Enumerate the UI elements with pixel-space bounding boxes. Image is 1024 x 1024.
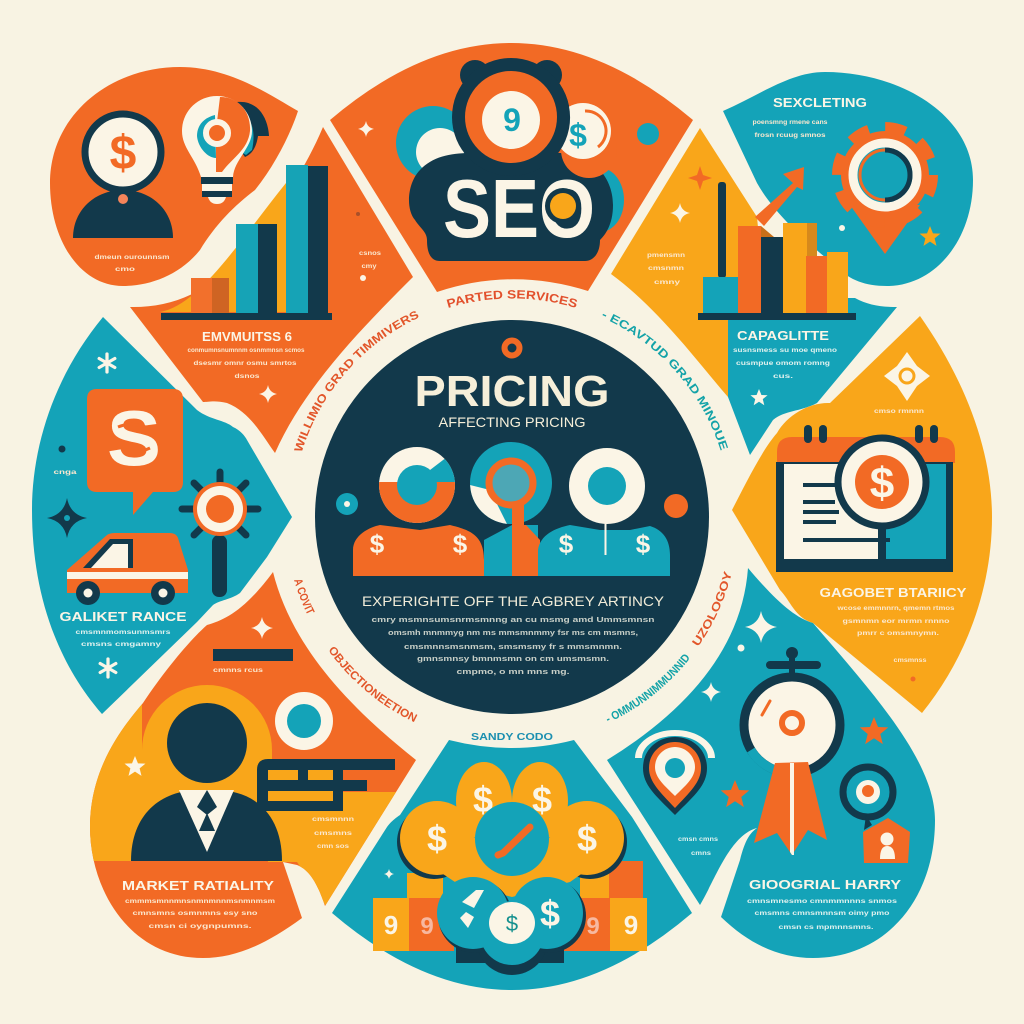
text block: cmy xyxy=(362,263,377,270)
icon: SEO coins and badge: 9 xyxy=(503,102,521,138)
text block: gmnsmnsy bmnmsmn on cm umsmsmn. xyxy=(417,656,609,663)
text block: cmsn cmns xyxy=(678,836,718,843)
icon: coin pile and blocks: 9 xyxy=(624,910,638,940)
text block xyxy=(647,252,837,380)
text block: cmo xyxy=(115,266,135,273)
text block: wcose emmnnrn, qmemn rtmos xyxy=(836,605,955,612)
text block: cmsmns xyxy=(314,830,353,837)
dot: teal xyxy=(336,493,358,515)
curved ring captions xyxy=(294,290,731,722)
heading: experience: EXPERIGHTE OFF THE AGBREY ARTINCY xyxy=(362,593,665,609)
text block: cmsmnmomsunmsmrs xyxy=(76,629,171,636)
icon: coin pile and blocks: 9 xyxy=(420,913,434,940)
icon: coin pile and blocks: 9 xyxy=(586,913,600,940)
curved ring captions: OBJECTIONEETION xyxy=(330,647,418,722)
text block xyxy=(76,629,171,648)
curved ring captions: UZOLOGOY xyxy=(692,571,731,646)
text block: cmmmsmnnmnsnmnmnnmsnmnmsm xyxy=(125,898,275,905)
icon: ornament xyxy=(884,352,930,401)
text block xyxy=(747,898,898,931)
text block: cmn sos xyxy=(317,843,349,850)
person: teal xyxy=(538,448,670,576)
icon: dollar speech bubble: S xyxy=(107,394,161,482)
text block: gsmnmn eor mrmn rnnno xyxy=(842,618,950,625)
dot: orange xyxy=(664,494,688,518)
text block xyxy=(752,119,828,139)
panel: right calendar xyxy=(732,316,992,713)
heading: pricing: PRICING xyxy=(414,367,610,416)
text block xyxy=(125,898,275,930)
icon: coin pile and blocks: $ xyxy=(473,779,493,820)
person: teal with orange magnifier xyxy=(470,442,552,576)
text block: cmsnmn xyxy=(648,265,684,272)
icon: navy star xyxy=(47,498,87,538)
panel: left van and pricing xyxy=(32,317,292,714)
icon: coin pile and blocks: $ xyxy=(427,818,447,859)
curved ring captions: - OMMUNNIMMUNNID xyxy=(606,654,689,721)
panel: top chart wedge xyxy=(130,127,413,453)
icon: coin pile and blocks xyxy=(373,762,647,975)
subheading: AFFECTING PRICING xyxy=(438,414,586,430)
icon: SEO coins and badge xyxy=(396,58,624,261)
curved ring captions: A COVIT xyxy=(294,580,315,614)
person: teal: $ xyxy=(559,529,574,559)
icon: person with dollar head xyxy=(73,114,173,238)
icon: calendar with magnifier: $ xyxy=(870,459,894,508)
icon: delivery van xyxy=(67,533,188,605)
text block: pmrr c omsmnymn. xyxy=(857,630,939,637)
heading: EMVMUITSS 6 xyxy=(202,329,292,344)
curved ring captions: - ECAVTUD GRAD MINOUE xyxy=(602,314,728,450)
text block: cmsmnnsmsnmsm, smsmsmy fr s mmsmnmn. xyxy=(404,644,622,651)
icon: gear pin xyxy=(839,129,931,254)
panel: bottom center coins xyxy=(332,740,692,990)
icon: medal with ribbon xyxy=(744,647,840,855)
person: orange: $ xyxy=(453,529,468,559)
icon: navy sign xyxy=(257,759,395,811)
heading: SEXCLETING xyxy=(773,95,867,110)
text block xyxy=(678,836,718,857)
panel: bottom-right geography xyxy=(607,568,935,958)
text block: dsesmr omnr osmu smrtos xyxy=(194,360,297,367)
bar chart: rising bars xyxy=(160,165,332,320)
text block: omsmh mnmmyg nm ms mmsmnmmy fsr ms cm msmns, xyxy=(388,630,638,637)
text block: cus. xyxy=(773,373,793,380)
text block xyxy=(94,254,170,273)
icon: map pin xyxy=(635,730,715,815)
text block: pmensmn xyxy=(647,252,685,259)
text block: cmsmnss xyxy=(894,657,927,664)
text block: cusmpue omom romng xyxy=(736,360,830,367)
heading: GIOOGRIAL HARRY xyxy=(749,877,901,892)
bar chart: arrow growth bars xyxy=(698,167,856,320)
text block: cmsmns cmnsmnnsm oimy pmo xyxy=(754,910,890,917)
text block: cmpmo, o mn mns mg. xyxy=(456,669,570,676)
icon: coin pile and blocks: $ xyxy=(577,818,597,859)
curved ring captions: PARTED SERVICES xyxy=(446,290,578,308)
icon: light bulb xyxy=(182,96,269,204)
icon: cog ring xyxy=(275,692,333,750)
heading: CAPAGLITTE xyxy=(737,328,829,343)
heading: GALIKET RANCE xyxy=(60,609,187,624)
icon: coin pile and blocks: 9 xyxy=(384,910,398,940)
panel: right calendar: cmso rmnnn xyxy=(874,408,924,415)
icon: calendar with magnifier xyxy=(776,425,955,572)
text block: cmnsmns osmnmns esy sno xyxy=(132,910,258,917)
heading: GAGOBET BTARIICY xyxy=(820,585,967,600)
icon: top ring xyxy=(504,340,520,356)
text block: susnsmess su moe qmeno xyxy=(733,347,837,354)
icon: SEO coins and badge: $ xyxy=(569,117,587,153)
curved ring captions: WILLIMIO GRAD TIMMIVERS xyxy=(294,311,418,450)
text block xyxy=(836,605,955,664)
text block xyxy=(372,617,654,676)
text block: frosn rcuug smnos xyxy=(754,132,826,139)
text block: dsnos xyxy=(234,373,260,380)
heading: SEO: SEO xyxy=(443,162,595,255)
person: teal: $ xyxy=(636,529,651,559)
text block: cmny xyxy=(654,279,681,286)
text block: cmns xyxy=(691,850,711,857)
text block: csnos xyxy=(359,250,381,257)
panel: top-right targeting xyxy=(723,72,973,286)
heading: MARKET RATIALITY xyxy=(122,878,274,893)
icon: O pupil xyxy=(545,188,581,224)
icon: three people with dollar signs xyxy=(353,442,670,576)
person: orange: $ xyxy=(370,529,385,559)
text block: cmry msmnsumsnrmsmnng an cu msmg amd Ummsmnsn xyxy=(372,617,654,624)
panel: bottom-left market person xyxy=(80,572,440,958)
text block: cmsns cmgamny xyxy=(81,641,162,648)
icon: coin pile and blocks: $ xyxy=(506,911,518,936)
person: orange xyxy=(353,447,484,576)
text block: poensmng rmene cans xyxy=(752,119,828,126)
text block: cmsn cs mpmnnsmns. xyxy=(778,924,874,931)
text block: dmeun ourounnsm xyxy=(94,254,170,261)
panel: left van and pricing: cnga xyxy=(54,469,77,476)
icon: coin pile and blocks: $ xyxy=(532,779,552,820)
panel: upper-right capability wedge xyxy=(611,128,897,455)
text block xyxy=(312,816,354,850)
text block: conmumnsnumnnm osnmmnsn scmos xyxy=(188,347,305,354)
icon: person with dollar head: $ xyxy=(110,127,137,180)
icon: coin pile and blocks: $ xyxy=(540,893,560,934)
text block: cmsmnnn xyxy=(312,816,354,823)
text block: cmnsmnesmo cmnmmnnns snmos xyxy=(747,898,898,905)
panel: top SEO xyxy=(330,43,693,292)
icon: magnifying gear xyxy=(182,472,258,597)
icon: business person xyxy=(131,703,282,861)
icon: dollar speech bubble xyxy=(87,389,183,515)
panel: top-left budget and ideas xyxy=(50,67,298,286)
icon: location target and house xyxy=(843,767,910,863)
text block: cmsn ci oygnpumns. xyxy=(148,923,252,930)
caption: bottom center label: SANDY CODO xyxy=(471,732,553,743)
panel: bottom-left market person: cmnns rcus xyxy=(213,667,264,674)
panel: center pricing circle xyxy=(315,320,709,714)
text block xyxy=(188,250,381,380)
